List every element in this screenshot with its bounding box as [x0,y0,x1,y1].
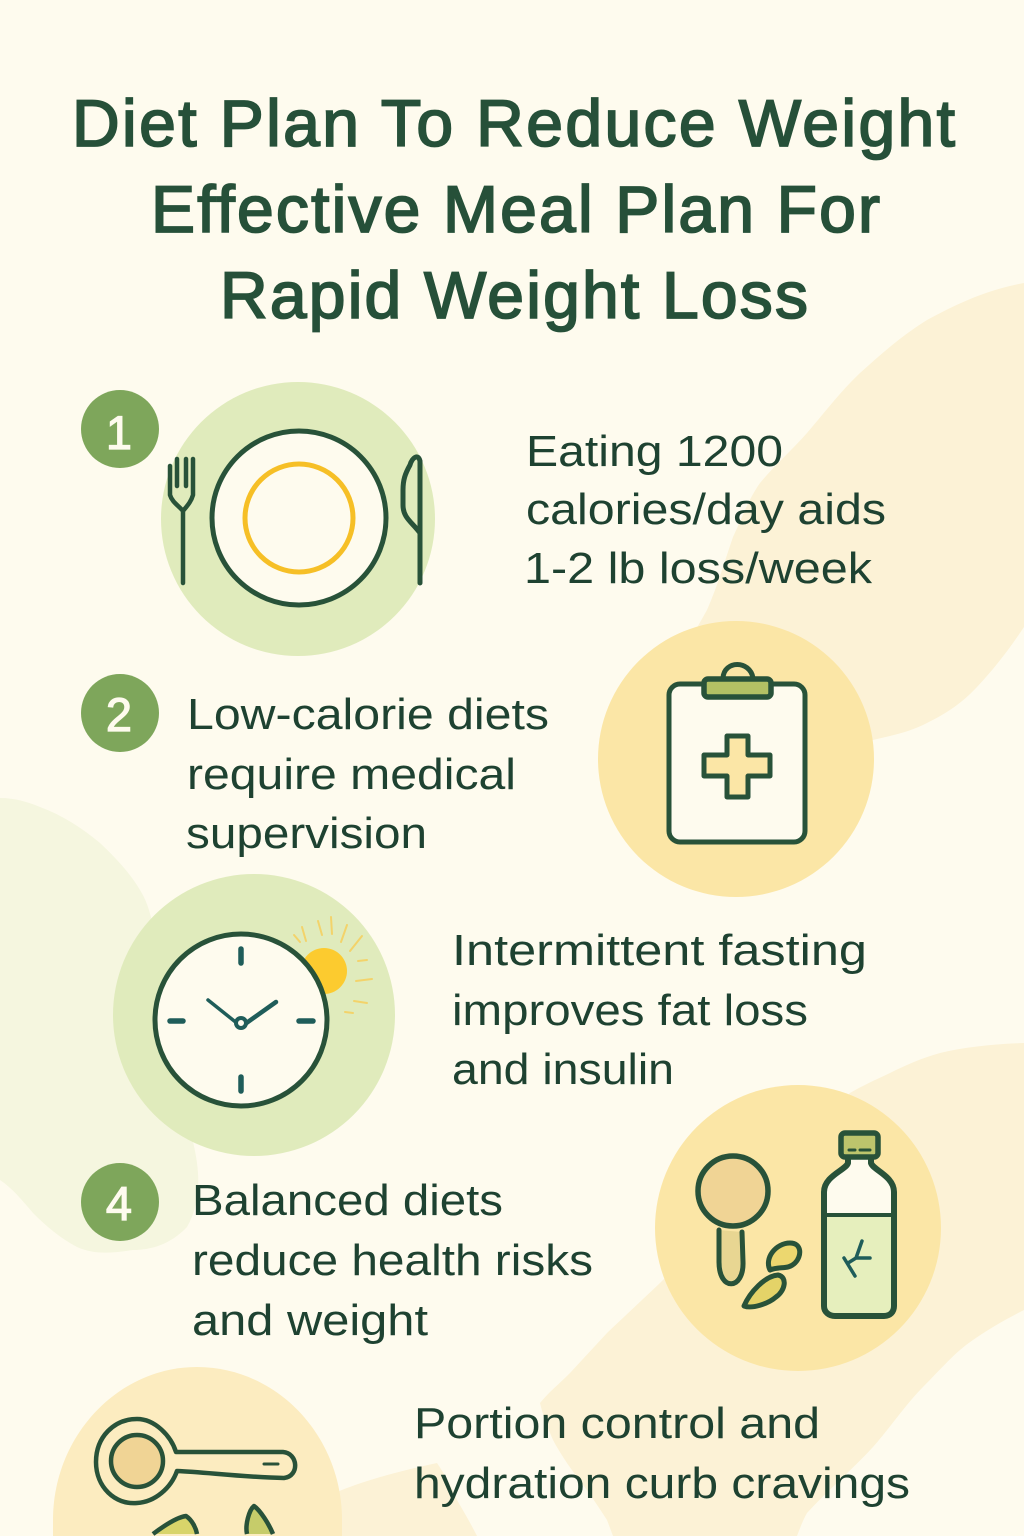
title: Effective Meal Plan For [151,172,880,246]
text: fasting: improves fat loss [452,986,808,1035]
number badge 1: 1 [106,406,132,459]
text: portion [414,1399,910,1508]
number badge 2 [81,674,159,752]
item 4: balanced diets [81,1085,941,1371]
title: Rapid Weight Loss [220,258,808,332]
text: balanced: and weight [192,1296,428,1345]
item 5: portion control [53,1367,910,1536]
icon: plate and cutlery [161,382,435,656]
item 1: plate calorie tip [81,382,886,656]
item 2: medical supervision [81,621,874,897]
text: calories: Eating 1200 [526,427,783,476]
title [72,86,955,332]
text: balanced: reduce health risks [192,1236,593,1285]
text: fasting [452,926,867,1094]
number badge 4 [81,1163,159,1241]
text: fasting: and insulin [452,1045,674,1094]
text: calories [524,427,886,593]
item 3: intermittent fasting [113,874,867,1156]
icon: clipboard with cross [598,621,874,897]
title: Diet Plan To Reduce Weight [72,86,955,160]
icon: measuring spoon and leaves [53,1367,342,1536]
text: medical: require medical [187,750,516,799]
icon: clock and sun [113,874,395,1156]
number badge 2: 2 [106,688,132,741]
text: medical: supervision [186,809,427,858]
text: calories: 1-2 lb loss/week [524,544,873,593]
text: portion: hydration curb cravings [414,1459,910,1508]
text: medical: Low-calorie diets [187,690,549,739]
text: portion: Portion control and [414,1399,820,1448]
text: fasting: Intermittent fasting [452,926,867,975]
number badge 1 [81,390,159,468]
text: medical [186,690,549,858]
text: balanced [192,1176,593,1345]
number badge 4: 4 [106,1177,132,1230]
text: calories: calories/day aids [526,485,886,534]
icon: spoon, seeds and bottle [655,1085,941,1371]
text: balanced: Balanced diets [192,1176,503,1225]
